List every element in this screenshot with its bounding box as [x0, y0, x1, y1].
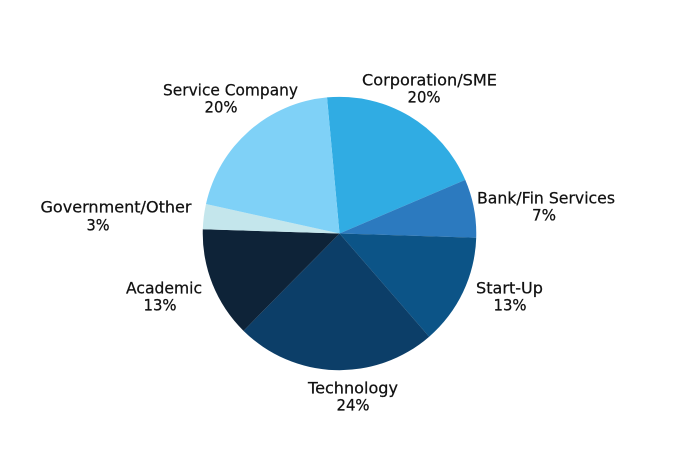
slice: Bank/Fin Services — [340, 180, 476, 238]
label: Service Company — [163, 80, 298, 116]
slice: Start-Up — [340, 234, 476, 337]
label: Technology: Technology — [307, 378, 398, 398]
pie chart — [203, 97, 476, 370]
label: Technology — [307, 378, 398, 414]
slice: Government/Other — [203, 204, 340, 234]
label: Start-Up — [476, 278, 543, 314]
label: Academic: 13% — [144, 296, 176, 314]
label: Start-Up: Start-Up — [476, 278, 543, 298]
label: Government/Other — [40, 198, 192, 234]
slice: Academic — [203, 229, 340, 331]
label: Start-Up: 13% — [494, 296, 526, 314]
label: Bank/Fin Services: Bank/Fin Services — [477, 188, 615, 208]
label: Corporation/SME — [362, 70, 497, 106]
label: Corporation/SME: Corporation/SME — [362, 70, 497, 90]
label: Service Company: 20% — [204, 98, 238, 116]
slice: Corporation/SME — [327, 97, 465, 234]
label: Bank/Fin Services — [477, 188, 615, 224]
label: Academic: Academic — [126, 278, 202, 298]
label: Government/Other: Government/Other — [40, 198, 192, 216]
slice: Service Company — [206, 97, 340, 234]
label: Corporation/SME: 20% — [408, 88, 440, 106]
label: Academic — [126, 278, 202, 314]
label: Technology: 24% — [336, 396, 370, 414]
slice: Technology — [244, 234, 429, 370]
label: Government/Other: 3% — [86, 216, 110, 234]
label: Bank/Fin Services: 7% — [532, 206, 556, 224]
label: Service Company: Service Company — [163, 80, 298, 100]
